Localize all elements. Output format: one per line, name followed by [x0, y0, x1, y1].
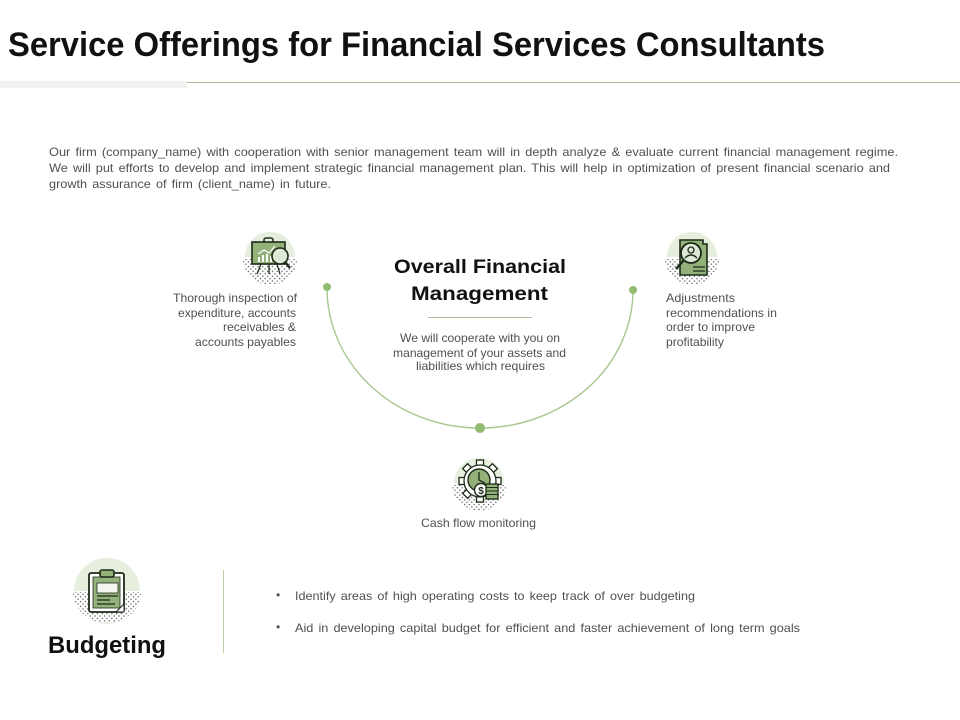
- left label: [173, 291, 298, 349]
- center divider: [428, 317, 532, 318]
- left label: Thorough inspection of: [173, 291, 298, 305]
- intro paragraph: [49, 145, 898, 191]
- bottom label: Cash flow monitoring: [421, 516, 536, 530]
- right label: recommendations in: [666, 306, 777, 320]
- left label: receivables &: [223, 320, 296, 334]
- right label: [666, 291, 777, 349]
- right label: order to improve: [666, 320, 755, 334]
- icon: presentation board with magnifier: [243, 232, 297, 285]
- budgeting bullets: Aid in developing capital budget for efficient and faster achievement of long term goals: [295, 621, 800, 635]
- semicircular arc with nodes: [323, 283, 637, 433]
- budgeting bullets: Identify areas of high operating costs to keep track of over budgeting: [295, 589, 695, 603]
- left label: accounts payables: [195, 335, 296, 349]
- intro paragraph: Our firm (company_name) with cooperation with senior management team will in depth analyze & evaluate current financial management regime.: [49, 145, 898, 159]
- center description: We will cooperate with you on: [400, 331, 560, 345]
- center description: liabilities which requires: [416, 359, 545, 373]
- title: Service Offerings for Financial Services Consultants: [8, 26, 825, 64]
- center heading: Overall Financial: [394, 257, 566, 278]
- icon: gear, clock and coins: $: [478, 486, 484, 497]
- budgeting heading: Budgeting: [48, 632, 166, 659]
- center description: [393, 331, 566, 373]
- budgeting bullets: [276, 588, 800, 635]
- vertical divider: [223, 570, 224, 653]
- right label: profitability: [666, 335, 724, 349]
- budgeting bullets: •: [276, 588, 280, 602]
- icon: clipboard: [73, 558, 141, 624]
- intro paragraph: growth assurance of firm (client_name) in future.: [49, 177, 331, 191]
- icon: document with magnifier: [665, 232, 719, 285]
- center description: management of your assets and: [393, 346, 566, 360]
- title rule: [0, 81, 960, 88]
- intro paragraph: We will put efforts to develop and implement strategic financial management plan. This will help in optimization of present financial scenario and: [49, 161, 890, 175]
- icon: gear, clock and coins: [452, 458, 506, 511]
- center heading: [394, 257, 566, 305]
- center heading: Management: [411, 284, 549, 305]
- budgeting bullets: •: [276, 620, 280, 634]
- left label: expenditure, accounts: [178, 306, 296, 320]
- right label: Adjustments: [666, 291, 735, 305]
